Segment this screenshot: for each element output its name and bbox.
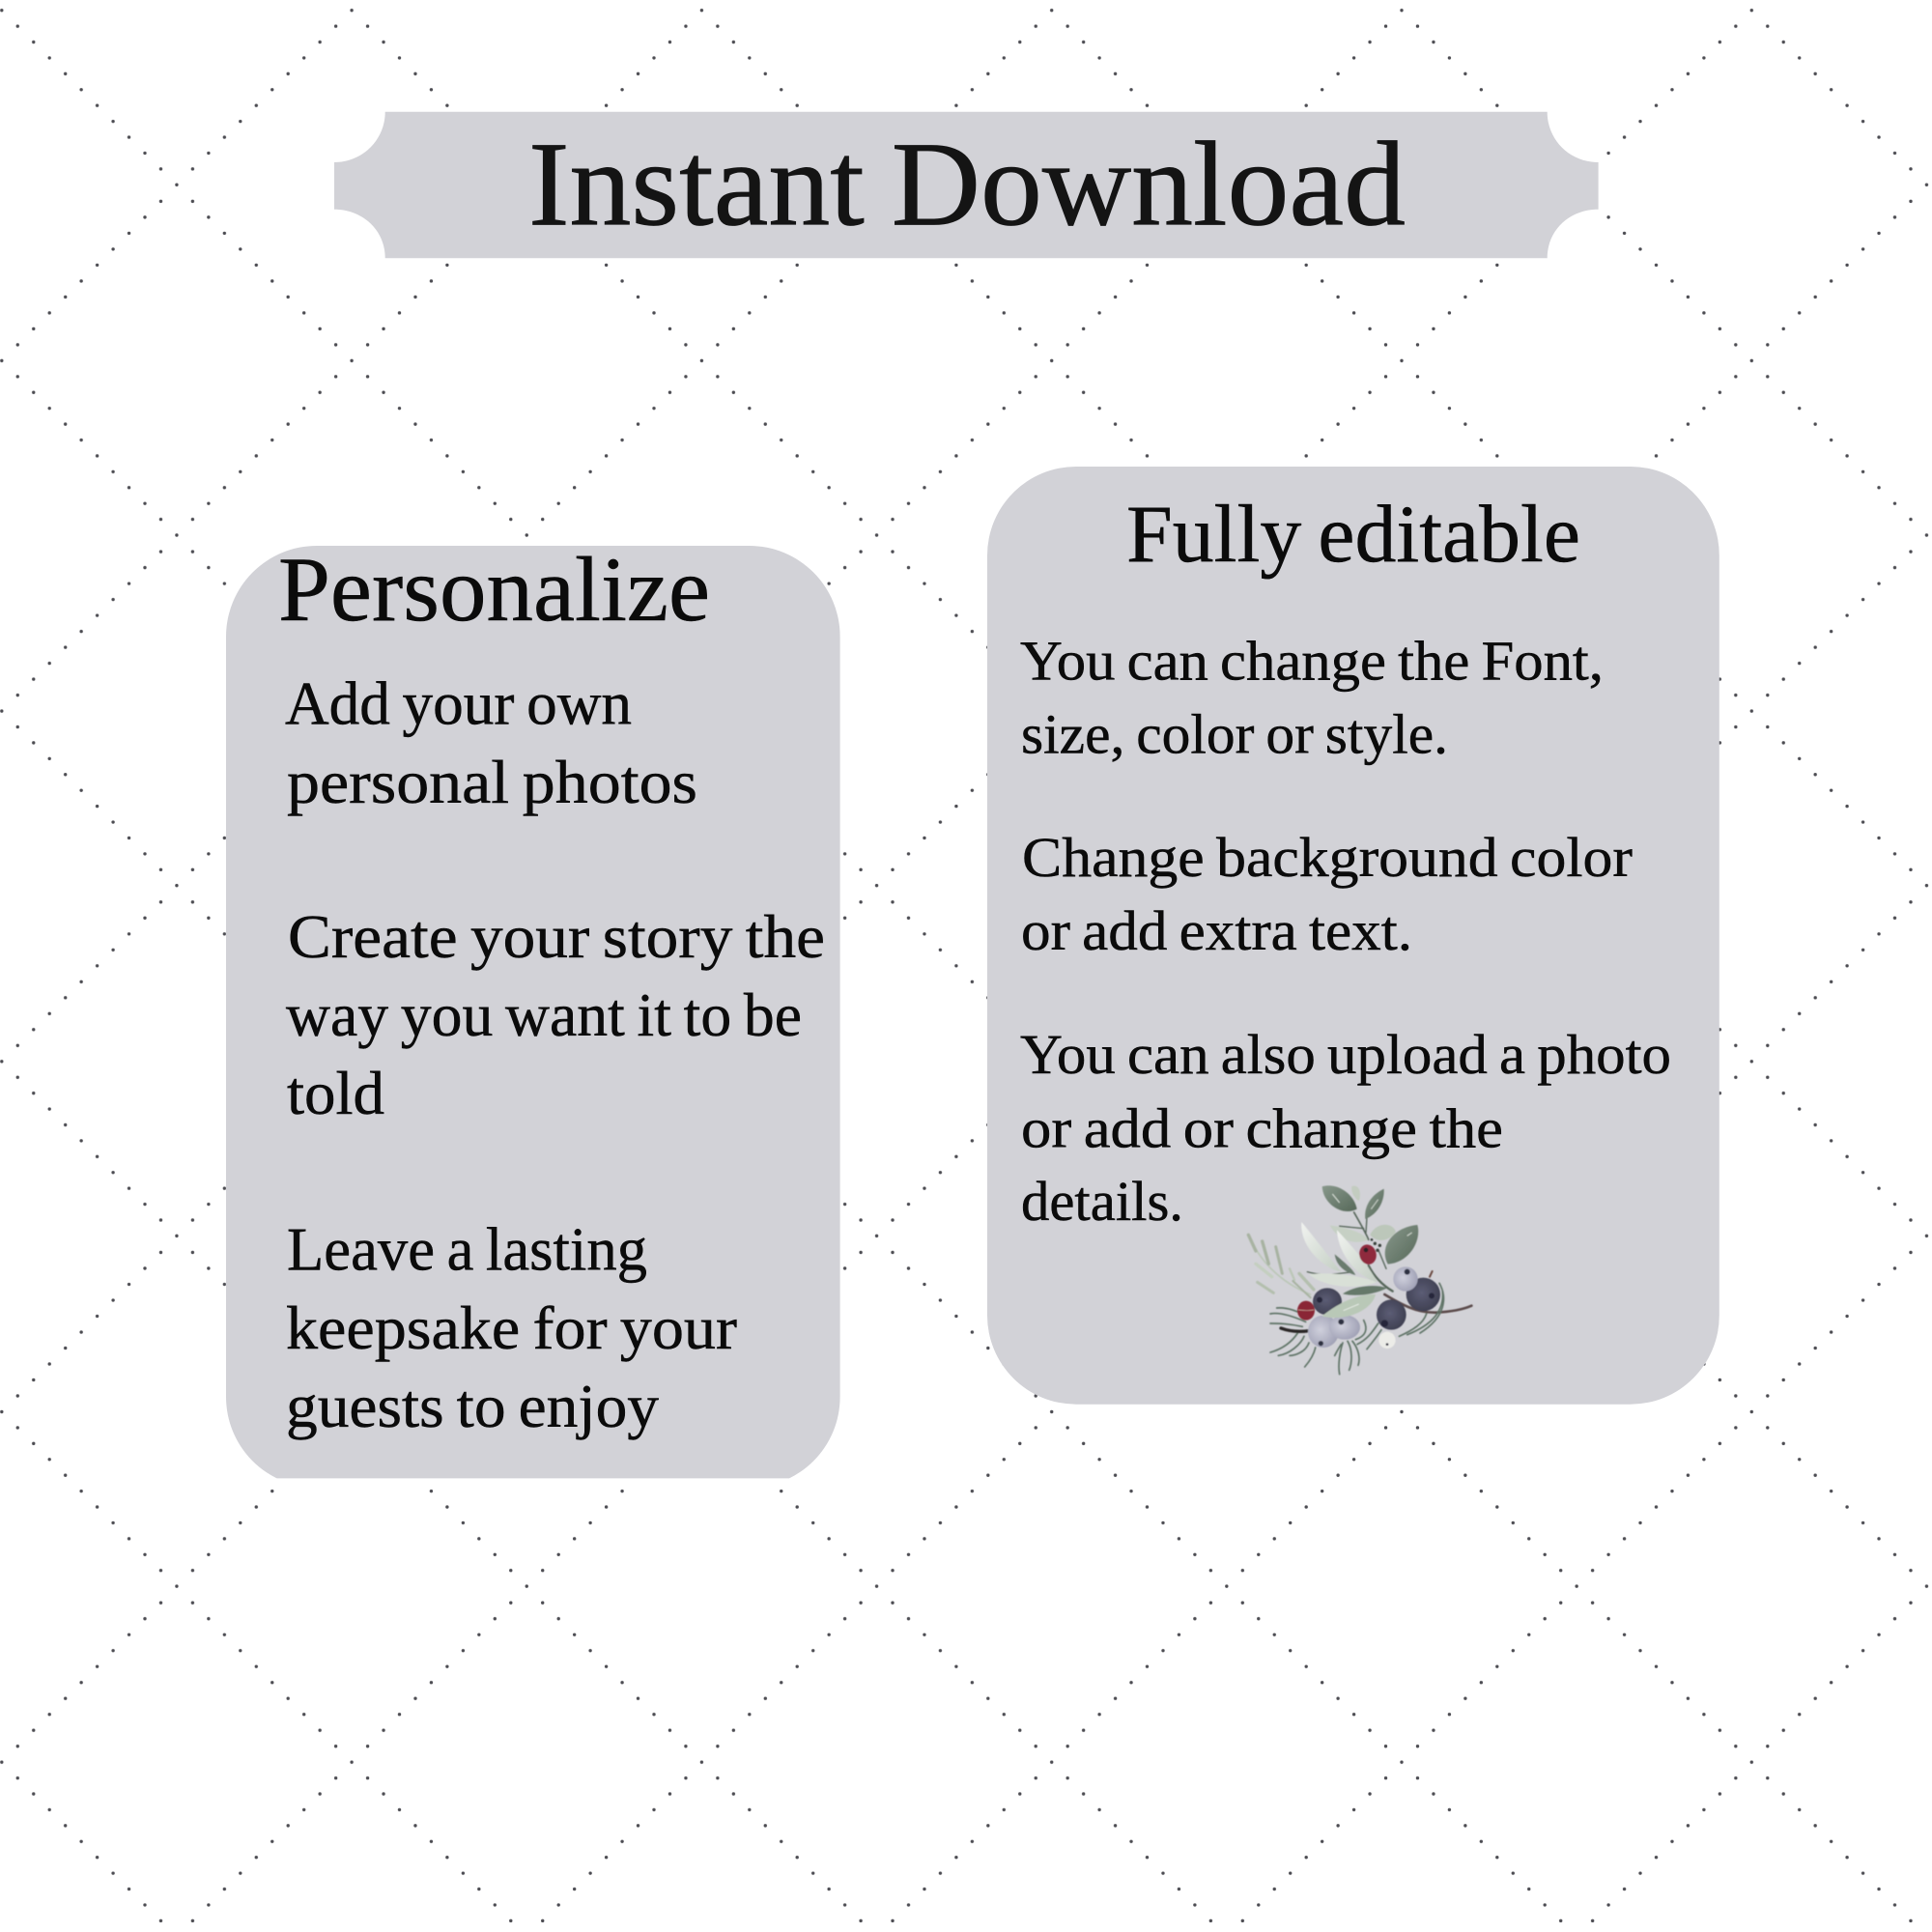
banner shape with notched corners (334, 112, 1599, 258)
right berries (1406, 1278, 1440, 1311)
top leaves (1322, 1185, 1357, 1211)
text: leave a lasting keepsake: keepsake for your (286, 1293, 737, 1362)
white berry (1378, 1332, 1396, 1349)
text: change background color (1021, 826, 1633, 962)
light berries (1308, 1316, 1339, 1348)
green pale leaf (1321, 1294, 1376, 1318)
pale background leaves (1370, 1225, 1396, 1240)
text: change the font (1020, 629, 1604, 765)
text: change the font: size, color or style. (1021, 703, 1448, 765)
small red berry (1297, 1301, 1315, 1321)
dark twig (1281, 1328, 1309, 1331)
panel background (987, 467, 1719, 1405)
text: leave a lasting keepsake: Leave a lasting (287, 1215, 647, 1283)
text: upload a photo: details. (1021, 1170, 1183, 1233)
panel: fully editable (987, 467, 1719, 1405)
dark slim leaf (1343, 1286, 1387, 1295)
stems (1307, 1212, 1393, 1292)
text: upload a photo: You can also upload a photo (1020, 1023, 1671, 1086)
text: upload a photo (1020, 1023, 1671, 1233)
text: create your story (286, 902, 825, 1127)
text: leave a lasting keepsake: guests to enjoy (286, 1372, 659, 1440)
red berry top (1357, 1242, 1378, 1266)
title banner (334, 112, 1599, 258)
text: change background color: Change background color (1022, 826, 1633, 889)
text: create your story: way you want it to be (286, 980, 802, 1049)
text: add your own photos (285, 668, 697, 816)
panel: personalize (226, 538, 840, 1488)
heading: Fully editable: Fully editable (1126, 489, 1580, 580)
panel background (226, 546, 840, 1488)
heading: Personalize: Personalize (278, 538, 710, 640)
big dark leaf (1385, 1225, 1418, 1264)
dark berry left (1313, 1288, 1342, 1315)
title text: Instant Download (528, 118, 1406, 251)
text: add your own photos: Add your own (285, 668, 632, 738)
left pale sprig (1248, 1235, 1314, 1297)
text: change background color: or add extra text. (1021, 899, 1412, 962)
icon: watercolor berry bouquet (1248, 1185, 1471, 1375)
text: create your story: told (287, 1059, 384, 1127)
branch (1384, 1294, 1471, 1313)
text: leave a lasting keepsake (286, 1215, 737, 1440)
needles (1270, 1283, 1443, 1375)
text: add your own photos: personal photos (287, 748, 697, 816)
white leaves (1301, 1222, 1341, 1272)
text: change the font: You can change the Font, (1020, 629, 1604, 692)
text: create your story: Create your story the (288, 902, 825, 971)
text: upload a photo: or add or change the (1021, 1097, 1503, 1159)
